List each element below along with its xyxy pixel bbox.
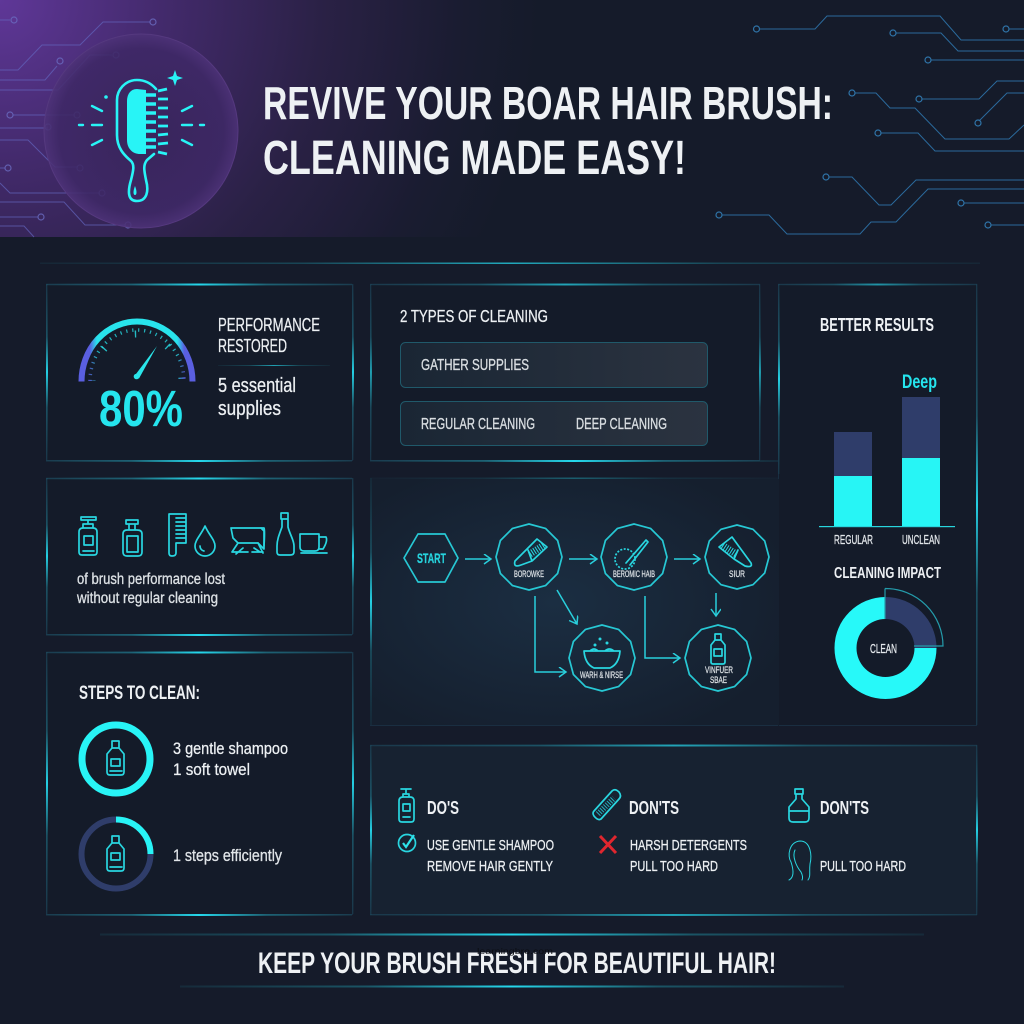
- performance label: RESTORED: [218, 335, 287, 356]
- row: gather supplies: [400, 342, 708, 388]
- node: wash and rinse: WARH & NIRSE: [580, 670, 623, 681]
- watermark: learningbro.com: [477, 947, 553, 956]
- circuit lines: right: [716, 16, 1024, 234]
- node: comb: SIUR: [729, 569, 745, 580]
- icon: shampoo bottle: [123, 520, 142, 556]
- column: do's: [398, 789, 554, 875]
- handle drop: [134, 186, 136, 195]
- node: brush: [496, 524, 562, 590]
- panel: performance gauge: [46, 284, 354, 462]
- steps heading: STEPS TO CLEAN:: [79, 683, 200, 704]
- column: do's: DO'S: [427, 797, 459, 818]
- brush outline: [117, 80, 156, 201]
- bar chart: Deep: [902, 372, 937, 393]
- gauge value: 80%: [99, 380, 183, 437]
- icon: comb: [169, 514, 186, 556]
- panel: better results: [778, 284, 978, 726]
- title: [263, 77, 833, 185]
- performance label: 5 essential: [218, 375, 296, 397]
- icon: tall bottle: [277, 513, 294, 555]
- footer message: KEEP YOUR BRUSH FRESH FOR BEAUTIFUL HAIR!: [258, 947, 776, 980]
- ring text one: [173, 739, 288, 779]
- bar chart: UNCLEAN: [902, 533, 940, 547]
- panel: supplies icons: [46, 478, 354, 636]
- sparkle: [167, 70, 183, 86]
- rays: [79, 106, 204, 145]
- types heading: 2 TYPES OF CLEANING: [400, 306, 548, 326]
- node: wash and rinse: [569, 625, 635, 691]
- performance label: supplies: [218, 398, 281, 420]
- node: vinegar soak: VINFUER: [705, 665, 733, 676]
- column: don'ts one: DON'TS: [629, 797, 679, 818]
- icon: water drop: [195, 526, 215, 556]
- icon: bowl on stand: [231, 528, 264, 554]
- column: do's: USE GENTLE SHAMPOO: [427, 837, 554, 854]
- top glow divider: [40, 262, 980, 264]
- ring text one: 3 gentle shampoo: [173, 739, 288, 758]
- column: don'ts one: PULL TOO HARD: [630, 858, 718, 875]
- node: vinegar soak: [685, 625, 751, 691]
- results heading: BETTER RESULTS: [820, 315, 934, 335]
- column: don'ts two: PULL TOO HARD: [820, 858, 906, 875]
- ring text one: 1 soft towel: [173, 760, 250, 779]
- node: vinegar soak: SBAE: [710, 675, 727, 686]
- flow arrows: [465, 559, 716, 672]
- performance label: [218, 314, 330, 420]
- icon: cup: [300, 534, 327, 553]
- icon: sparkling brush in circle: [44, 34, 238, 228]
- column: do's: REMOVE HAIR GENTLY: [427, 858, 553, 875]
- row: gather supplies: GATHER SUPPLIES: [421, 357, 529, 374]
- header band: [0, 0, 1024, 237]
- row: cleaning types: DEEP CLEANING: [576, 416, 667, 433]
- panel: types of cleaning: [370, 284, 778, 462]
- donut chart: [834, 588, 943, 699]
- footer glow line top: [100, 934, 924, 936]
- column: don'ts two: [789, 789, 906, 880]
- title: REVIVE YOUR BOAR HAIR BRUSH:: [263, 77, 833, 129]
- panel: cleaning flowchart: [370, 478, 779, 726]
- brush bristles: [142, 95, 156, 147]
- column: don'ts one: [593, 790, 747, 875]
- supplies caption: of brush performance lost: [77, 571, 226, 588]
- row: cleaning types: [400, 402, 708, 446]
- footer glow line bottom: [180, 986, 844, 988]
- panel: steps to clean: [46, 652, 354, 916]
- gauge: [82, 322, 192, 382]
- start node: [404, 534, 458, 582]
- node: brush: BOROWKE: [514, 569, 544, 580]
- column: don'ts one: HARSH DETERGENTS: [630, 837, 747, 854]
- donut chart: CLEAN: [870, 642, 897, 656]
- bar chart: [819, 372, 955, 547]
- bar chart: REGULAR: [834, 533, 873, 547]
- icon: pump bottle: [79, 517, 97, 555]
- supplies caption: [76, 571, 226, 607]
- start node: START: [417, 551, 446, 566]
- impact heading: CLEANING IMPACT: [834, 565, 941, 582]
- row: cleaning types: REGULAR CLEANING: [421, 416, 535, 433]
- brush pad: [127, 89, 146, 154]
- node: boar hair: [601, 524, 667, 590]
- ring: full progress: [82, 725, 150, 793]
- ring text two: 1 steps efficiently: [173, 846, 282, 865]
- supplies caption: without regular cleaning: [76, 590, 218, 607]
- node: comb: [705, 525, 769, 589]
- column: don'ts two: DON'TS: [820, 797, 869, 818]
- ring: quarter progress: [82, 820, 150, 888]
- panel: do's and don'ts: [370, 744, 978, 916]
- title: CLEANING MADE EASY!: [263, 132, 686, 185]
- performance label: PERFORMANCE: [218, 314, 320, 335]
- node: boar hair: BEROMIC HAIB: [613, 569, 655, 580]
- circuit lines: left: [0, 17, 156, 237]
